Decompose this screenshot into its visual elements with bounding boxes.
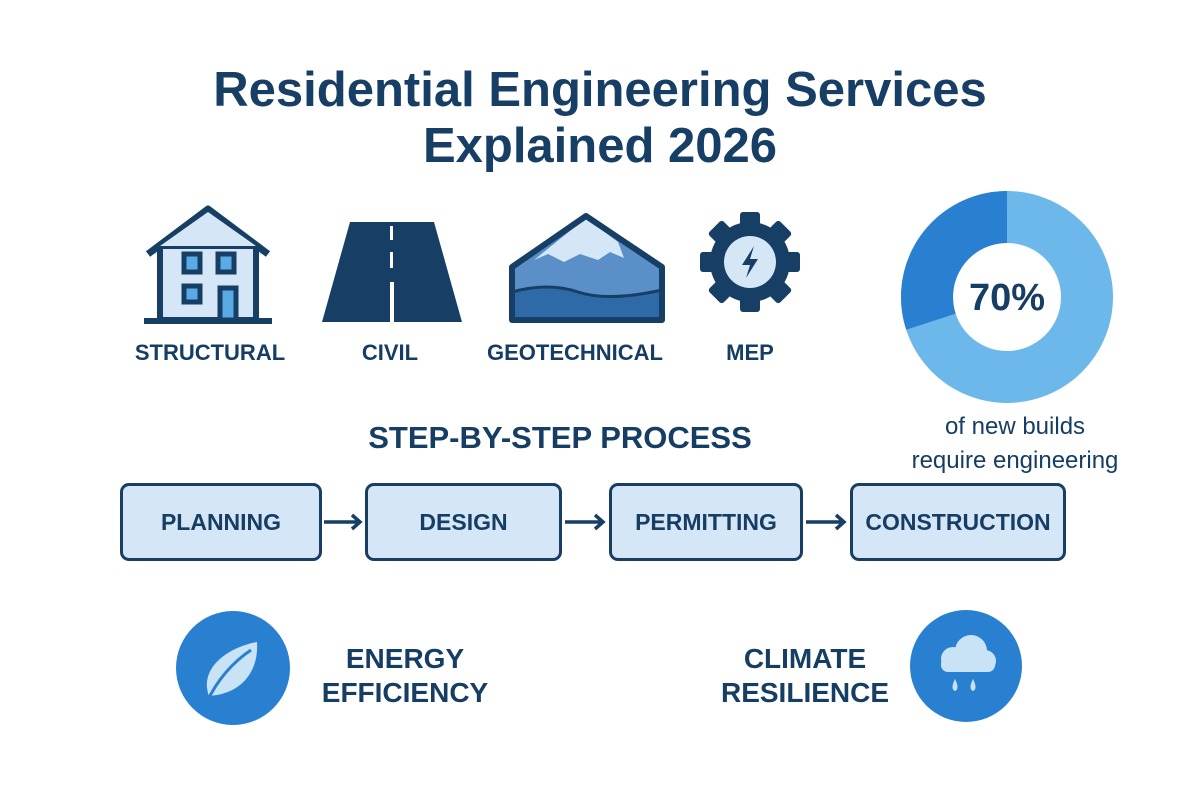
label: geotechnical: GEOTECHNICAL [487, 340, 663, 365]
text: climate resilience: RESILIENCE [721, 677, 889, 708]
step: design [365, 483, 562, 561]
text: energy efficiency: EFFICIENCY [322, 677, 488, 708]
step: planning [120, 483, 322, 561]
step: design: DESIGN [419, 508, 508, 534]
step: planning: PLANNING [161, 508, 281, 534]
arrow [806, 514, 847, 530]
step: construction: CONSTRUCTION [865, 508, 1051, 534]
icon: house [144, 205, 272, 324]
icon: road [322, 222, 462, 322]
icon: gear [700, 212, 800, 312]
label: MEP: MEP [726, 340, 774, 365]
step: construction [850, 483, 1066, 561]
icon: mountain [509, 213, 665, 323]
arrow [324, 514, 363, 530]
step: permitting [609, 483, 803, 561]
donut caption: require engineering [912, 447, 1118, 474]
arrow [565, 514, 606, 530]
title: Explained 2026 [423, 119, 777, 173]
title [213, 63, 987, 173]
text: climate resilience: CLIMATE [744, 643, 866, 674]
donut caption [912, 413, 1118, 474]
section heading: STEP-BY-STEP PROCESS [368, 420, 752, 455]
step: permitting: PERMITTING [635, 508, 777, 534]
donut chart: 70% [969, 277, 1045, 319]
text: climate resilience [721, 643, 889, 708]
label: structural: STRUCTURAL [135, 340, 285, 365]
icon: cloud [910, 610, 1022, 722]
donut chart [901, 191, 1113, 403]
donut caption: of new builds [945, 413, 1085, 440]
title: Residential Engineering Services [213, 63, 987, 117]
label: civil: CIVIL [362, 340, 418, 365]
text: energy efficiency: ENERGY [346, 643, 464, 674]
icon: leaf [176, 611, 290, 725]
text: energy efficiency [322, 643, 488, 708]
